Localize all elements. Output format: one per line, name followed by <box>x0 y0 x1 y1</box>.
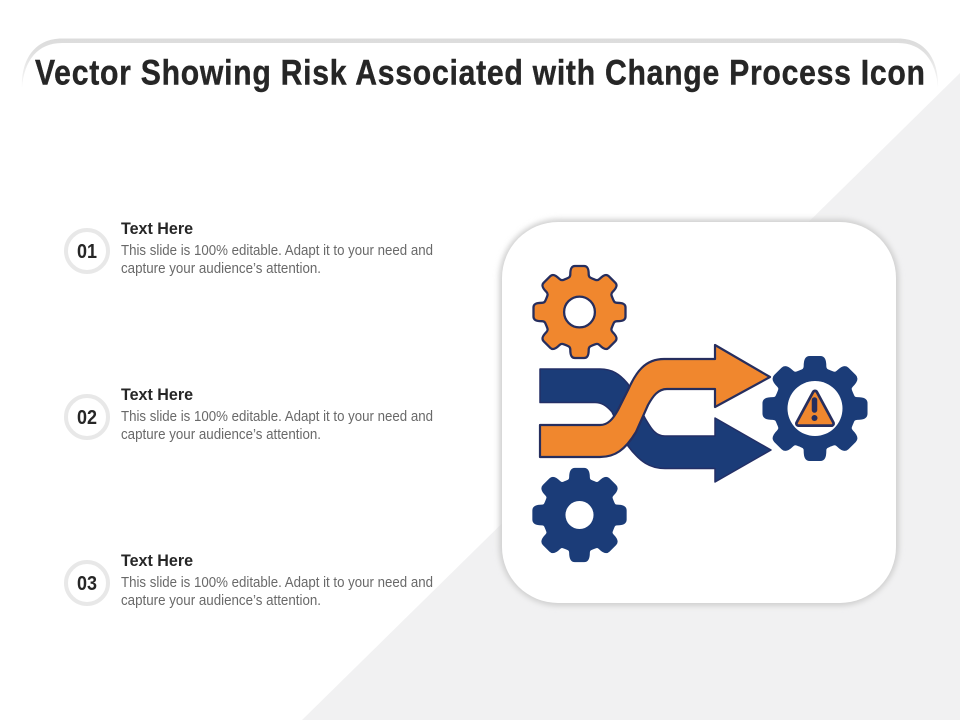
badge 03: 03 <box>77 573 97 595</box>
icon: warning gear <box>764 357 866 460</box>
body 03 <box>121 575 433 609</box>
arrow: orange crossing arrow <box>540 345 770 457</box>
body 02 <box>121 409 433 443</box>
background diagonal panel <box>302 73 960 720</box>
heading 01: Text Here <box>121 219 193 238</box>
title: Vector Showing Risk Associated with Change Process Icon <box>35 52 925 92</box>
badge 02 <box>66 396 108 438</box>
title bar <box>22 38 938 92</box>
body 03: This slide is 100% editable. Adapt it to your need and <box>121 575 433 591</box>
body 03: capture your audience’s attention. <box>121 593 321 609</box>
item 02 <box>66 385 433 443</box>
badge 02: 02 <box>77 407 97 429</box>
body 02: capture your audience’s attention. <box>121 427 321 443</box>
body 01 <box>121 243 433 277</box>
heading 03: Text Here <box>121 551 193 570</box>
arrow: blue crossing arrow <box>540 369 771 482</box>
icon: blue gear <box>534 469 626 561</box>
badge 01: 01 <box>77 241 97 263</box>
body 01: This slide is 100% editable. Adapt it to your need and <box>121 243 433 259</box>
heading 02: Text Here <box>121 385 193 404</box>
icon: warning triangle <box>798 393 832 424</box>
body 02: This slide is 100% editable. Adapt it to your need and <box>121 409 433 425</box>
card panel <box>499 219 899 606</box>
body 01: capture your audience’s attention. <box>121 261 321 277</box>
item 01 <box>66 219 433 277</box>
badge 03 <box>66 562 108 604</box>
item 03 <box>66 551 433 609</box>
icon: orange gear <box>534 266 626 358</box>
badge 01 <box>66 230 108 272</box>
